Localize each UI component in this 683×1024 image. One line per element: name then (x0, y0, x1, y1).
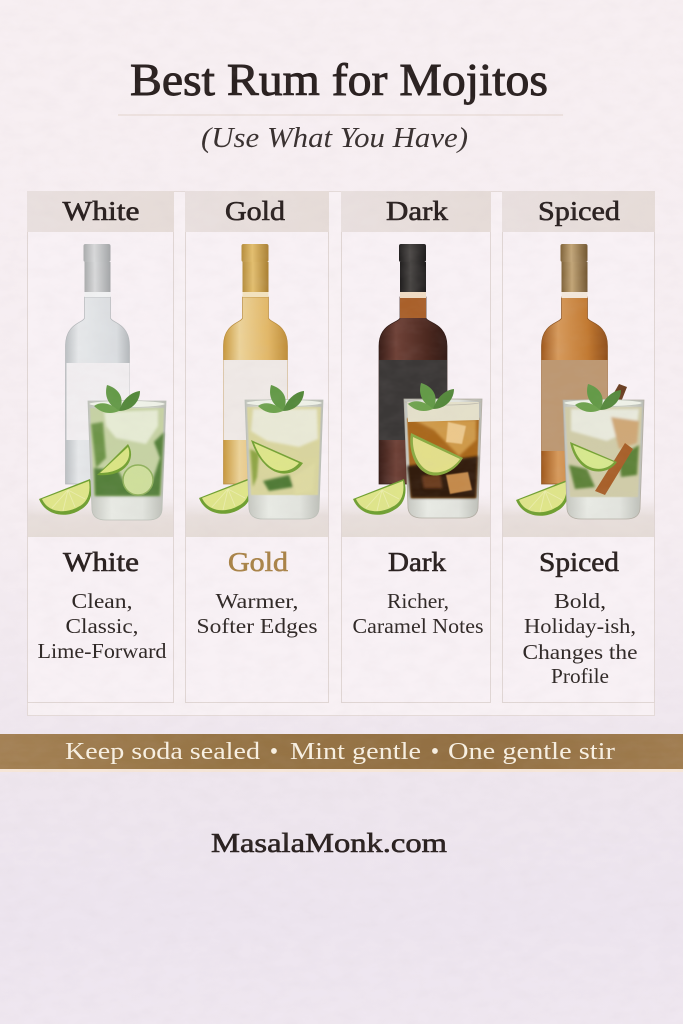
header: Spiced: Spiced (538, 196, 621, 226)
wedge (353, 479, 406, 515)
panel: Spiced (502, 191, 655, 702)
subtitle: (Use What You Have) (201, 123, 468, 154)
description: Gold: Warmer, (216, 589, 298, 613)
panel: Gold (185, 191, 329, 702)
bottle: white rum (66, 244, 130, 484)
glass with spiced mojito (563, 384, 644, 519)
tips banner: Mint gentle (290, 739, 421, 765)
description: Spiced: Profile (551, 664, 609, 688)
description: White: Classic, (66, 614, 138, 638)
wedge (39, 479, 92, 515)
tips banner: Keep soda sealed (65, 739, 260, 765)
outer frame (28, 192, 654, 716)
rum name: Dark: Dark (388, 547, 447, 577)
glass with dark mojito (404, 383, 482, 518)
bottle: dark rum (379, 244, 447, 484)
glass with mojito (88, 385, 166, 520)
panel: White (27, 191, 174, 702)
description: Spiced (522, 589, 638, 688)
header: Dark (341, 191, 491, 232)
header: Gold: Gold (225, 196, 286, 226)
header: Gold (185, 191, 329, 232)
tips banner: • (431, 739, 439, 765)
wedge (516, 480, 569, 516)
tips banner: • (270, 739, 278, 765)
tips banner: One gentle stir (448, 739, 615, 765)
header: White: White (62, 196, 140, 226)
rum name: White: White (63, 547, 139, 577)
description: White (38, 589, 167, 663)
bottle: spiced rum (542, 244, 608, 484)
panel: Dark (341, 191, 491, 702)
description: White: Clean, (72, 589, 132, 613)
header: Dark: Dark (386, 196, 449, 226)
glass with mojito (245, 385, 323, 519)
header: Spiced (502, 191, 655, 232)
title: Best Rum for Mojitos (130, 54, 548, 105)
description: Gold (196, 589, 318, 638)
wedge (199, 478, 252, 514)
description: Gold: Softer Edges (196, 614, 318, 638)
description: Dark (352, 589, 484, 638)
description: Spiced: Holiday-ish, (524, 614, 636, 638)
website: MasalaMonk.com (211, 828, 447, 858)
rum name: Gold: Gold (228, 547, 289, 577)
description: Dark: Caramel Notes (352, 614, 484, 638)
rum name: Spiced: Spiced (539, 547, 620, 577)
description: White: Lime-Forward (38, 639, 167, 663)
bottle: gold rum (224, 244, 288, 484)
description: Spiced: Bold, (554, 589, 606, 613)
tips banner (0, 734, 683, 772)
description: Spiced: Changes the (522, 640, 638, 664)
description: Dark: Richer, (387, 589, 449, 613)
header: White (27, 191, 174, 232)
